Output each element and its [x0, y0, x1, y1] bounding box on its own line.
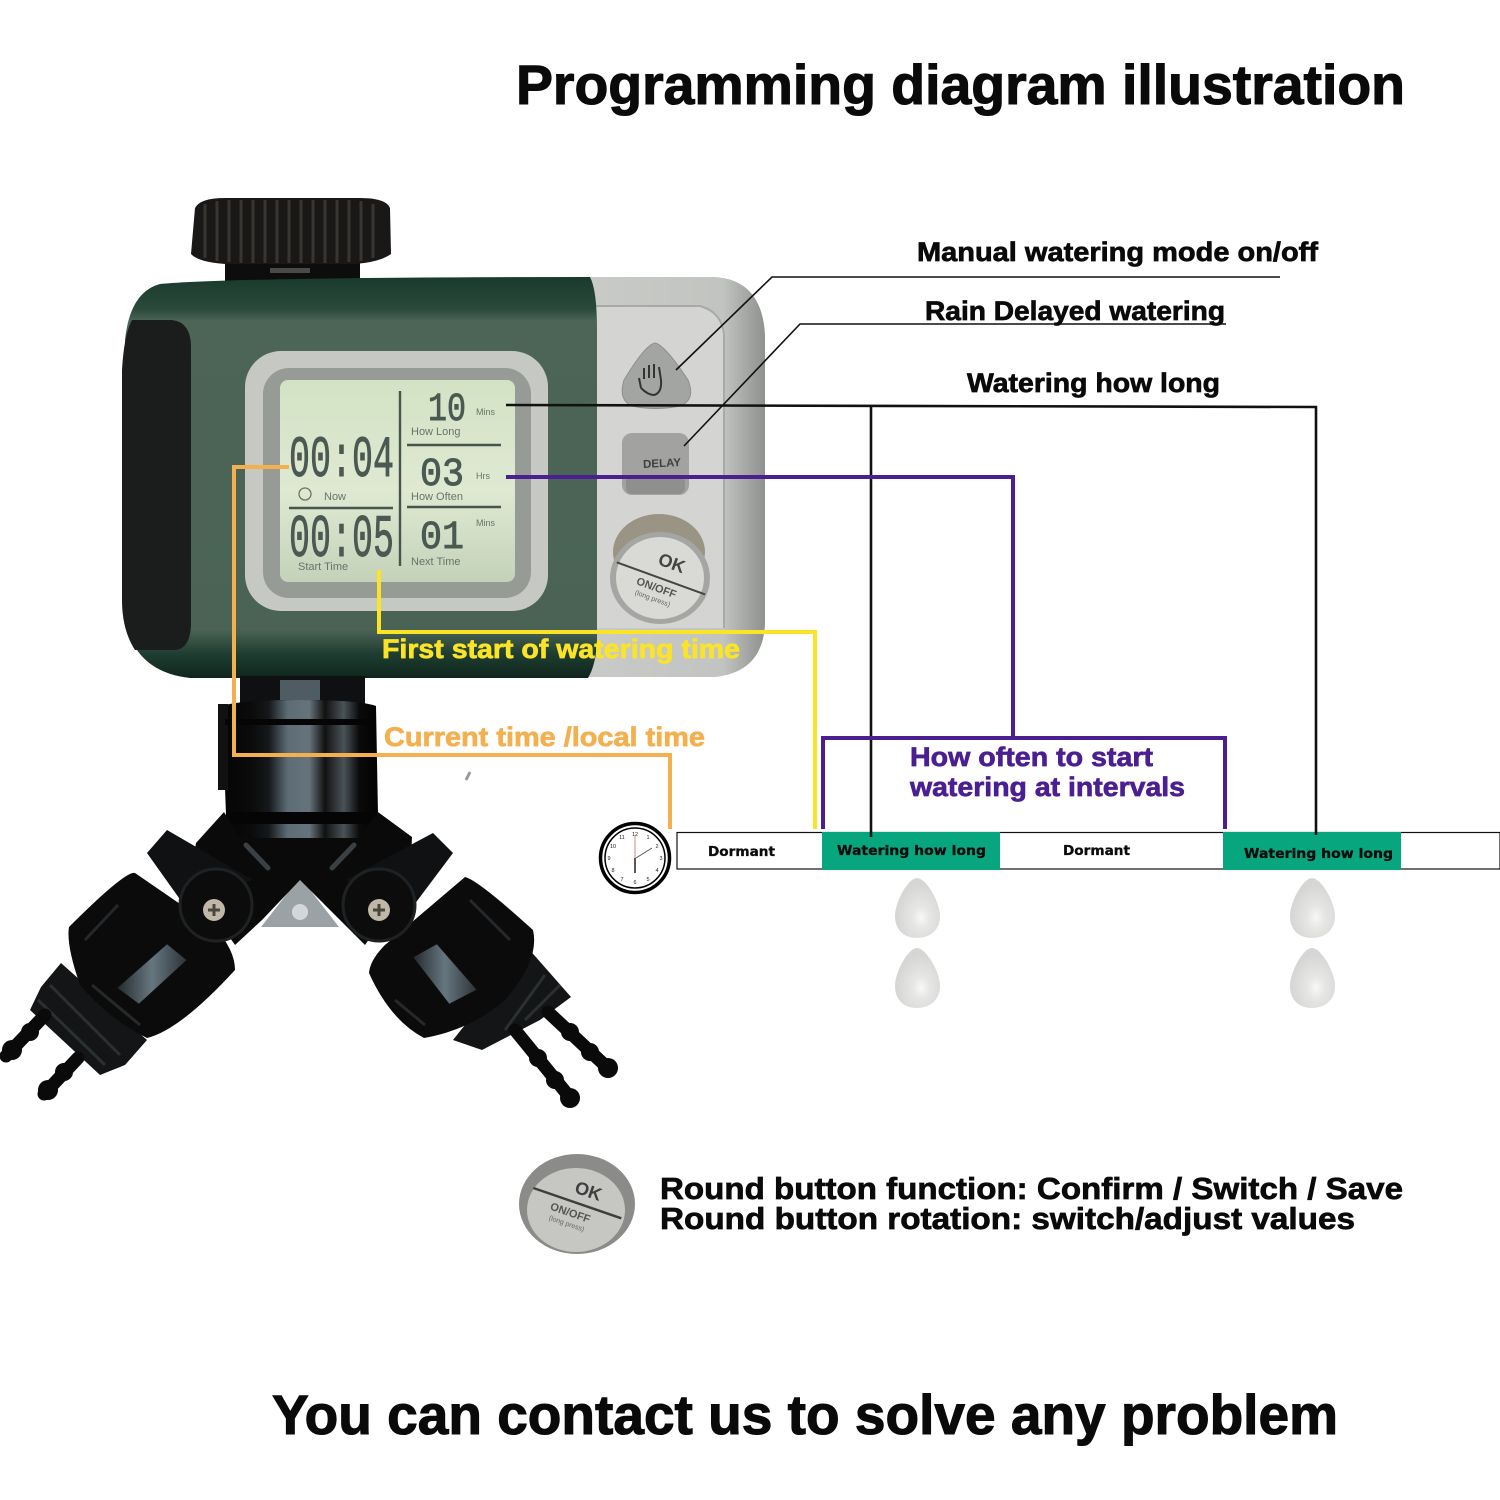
drop 3: [1290, 878, 1335, 938]
icon: clock: 9: [607, 856, 611, 862]
text: watering 1: Watering how long: [837, 844, 986, 859]
icon: clock: 8: [611, 868, 615, 874]
right grey button panel: [575, 277, 765, 677]
LCD screen: 00:04: [289, 429, 394, 494]
label: watering how long: Watering how long: [967, 368, 1220, 398]
delay button: [622, 433, 689, 495]
LCD screen: 10: [428, 388, 466, 433]
text: watering 2: Watering how long: [1244, 847, 1393, 862]
icon: clock: 4: [655, 868, 659, 874]
drop 1: [895, 878, 940, 938]
LCD screen: How Often: [411, 491, 463, 503]
text: dormant 2: Dormant: [1063, 844, 1130, 859]
threaded inlet knob: [191, 198, 391, 285]
LCD screen: 00:05: [289, 507, 394, 575]
LCD screen: Mins: [476, 407, 496, 417]
LCD screen: 01: [420, 516, 464, 561]
LCD bezel: [245, 351, 548, 611]
LCD screen: 03: [420, 453, 464, 498]
black side grip: [122, 320, 191, 650]
icon: clock: 10: [610, 844, 616, 850]
LCD screen: Next Time: [411, 556, 461, 568]
drop 4: [1290, 948, 1335, 1008]
label: how often: watering at intervals: [909, 772, 1185, 802]
icon: round button close-up: (long press): [548, 1215, 585, 1234]
yellow first start line: [379, 570, 815, 829]
icon: clock: 7: [620, 877, 624, 883]
label: first start: First start of watering time: [382, 634, 740, 664]
round button description: Round button rotation: switch/adjust values: [660, 1201, 1355, 1236]
segment: watering 2: [1223, 832, 1401, 870]
icon: clock: 5: [646, 877, 650, 883]
black marker 1: [870, 832, 872, 837]
icon: clock: 12: [632, 832, 638, 838]
wall bracket: [261, 877, 339, 927]
LCD screen: [280, 380, 515, 582]
round OK button: ON/OFF: [635, 576, 678, 601]
right coupling nut: [369, 877, 618, 1108]
manual hand button: [622, 343, 691, 408]
black callout lines: [506, 277, 1316, 836]
icon: clock: [600, 824, 670, 892]
icon: round button close-up: ON/OFF: [549, 1201, 592, 1226]
neck and coupling: [218, 676, 378, 845]
product photo: Y connector: [2, 676, 618, 1108]
LCD screen: Mins: [476, 518, 496, 528]
label: rain delay: Rain Delayed watering: [925, 296, 1225, 326]
round button description: Round button function: Confirm / Switch / Save: [660, 1171, 1403, 1206]
LCD screen: Start Time: [298, 561, 348, 573]
label: current time: Current time /local time: [384, 722, 705, 752]
footer heading: You can contact us to solve any problem: [272, 1383, 1338, 1446]
green housing: [125, 277, 597, 678]
product photo: water timer: [122, 198, 765, 678]
LCD screen: How Long: [411, 426, 461, 438]
Y body highlights: [246, 845, 354, 868]
icon: clock: 6: [633, 880, 637, 886]
label: how often: How often to start: [910, 742, 1153, 772]
left coupling nut: [2, 873, 235, 1100]
timeline bar: [677, 832, 1500, 870]
round OK button: OK: [656, 549, 688, 577]
orange current time line: [234, 467, 670, 829]
LCD screen: Now: [324, 491, 346, 503]
segment: watering 1: [822, 832, 1000, 870]
left valve handle: [147, 830, 253, 941]
drop 2: [895, 948, 940, 1008]
text: dormant 1: Dormant: [708, 845, 775, 860]
black marker 2: [1315, 832, 1317, 835]
icon: clock: 3: [659, 856, 663, 862]
LCD screen: Hrs: [476, 471, 490, 481]
right valve handle: [343, 833, 453, 941]
round OK button: [608, 514, 715, 624]
round OK button: (long press): [634, 590, 671, 609]
icon: clock: 1: [646, 835, 650, 841]
icon: round button close-up: [519, 1154, 635, 1254]
stray mark: [466, 772, 470, 780]
icon: clock: 11: [619, 835, 625, 841]
delay button: DELAY: [643, 457, 682, 471]
icon: round button close-up: OK: [572, 1177, 604, 1205]
title: Programming diagram illustration: [516, 53, 1405, 116]
Y body: [190, 812, 412, 945]
purple how often lines: [506, 477, 1225, 829]
label: manual watering: Manual watering mode on/off: [917, 237, 1319, 267]
water drops: [895, 878, 1335, 1008]
icon: clock: 2: [655, 844, 659, 850]
